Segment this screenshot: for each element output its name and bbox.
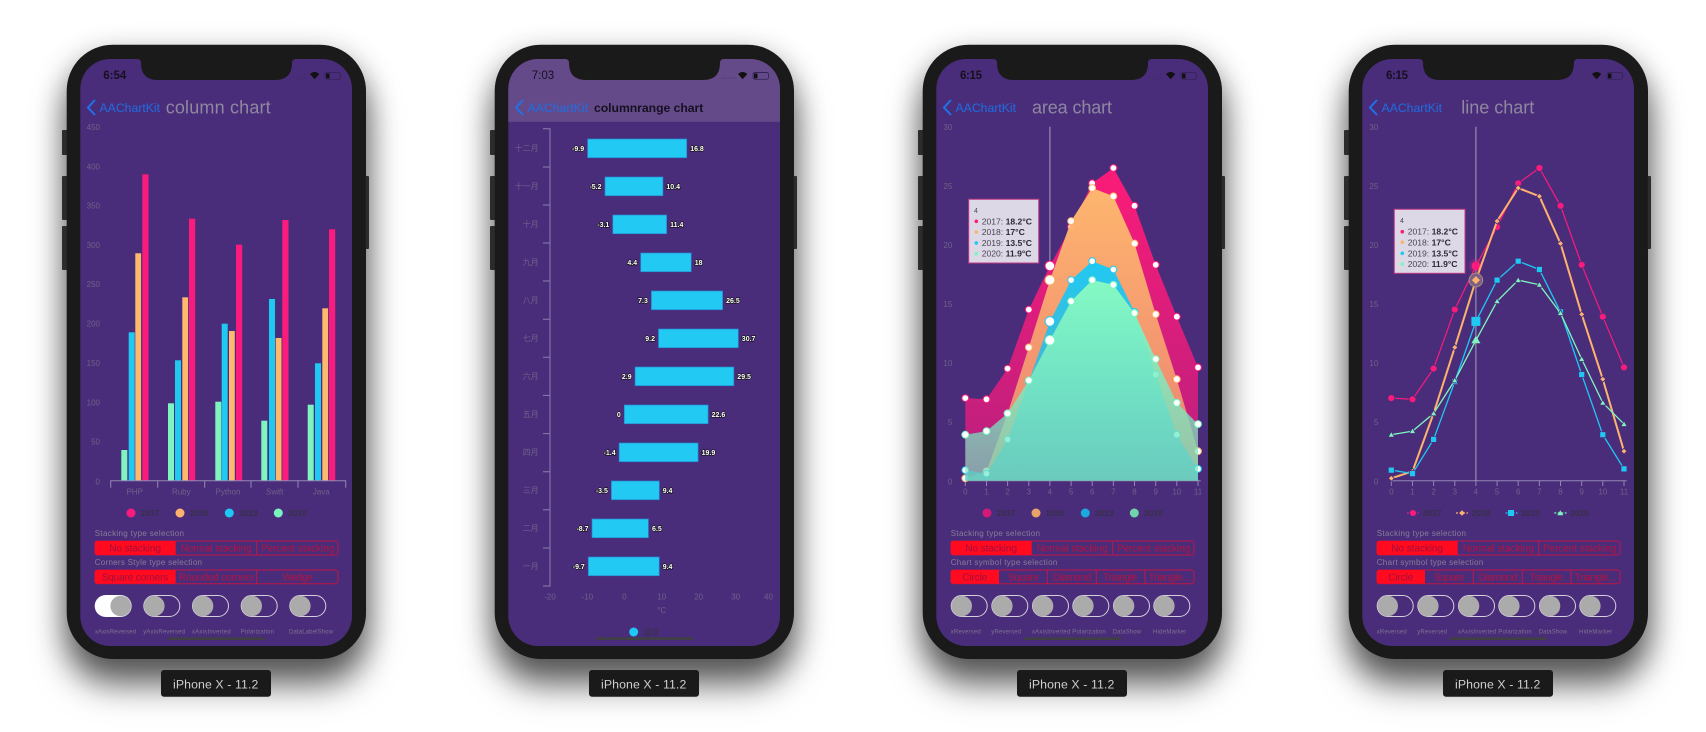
category axis: 五月 xyxy=(523,410,539,419)
category axis: 四月 xyxy=(523,448,539,457)
value axis labels: 10 xyxy=(657,592,667,602)
data labels high: 10.4 xyxy=(666,184,680,191)
status bar xyxy=(960,70,1196,82)
y axis labels: 0 xyxy=(96,478,101,486)
data labels low: 4.4 xyxy=(627,260,637,267)
range bars xyxy=(588,139,738,576)
stacking type selector: Normal stacking xyxy=(1037,544,1108,554)
data labels high: 30.7 xyxy=(742,336,756,343)
y axis labels: 5 xyxy=(948,418,953,427)
crosshair xyxy=(1049,127,1051,481)
chart symbol selector xyxy=(951,558,1194,584)
tooltip: 2020: 11.9°C xyxy=(982,249,1032,259)
stacking type selector: No stacking xyxy=(1391,544,1443,554)
device caption: iPhone X - 11.2 xyxy=(173,678,258,692)
chart symbol selector: Triangle... xyxy=(1575,572,1616,583)
legend: 2019 xyxy=(239,508,258,518)
legend: 2020 xyxy=(1570,508,1589,518)
toggle switches xyxy=(95,595,334,636)
device frame xyxy=(1344,45,1651,659)
tooltip: 2019: 13.5°C xyxy=(982,238,1032,248)
category axis xyxy=(515,129,550,586)
toggle switches: xAxisInverted xyxy=(1032,630,1070,636)
toggle switches: HideMarker xyxy=(1153,630,1186,636)
toggle switches: Polarization xyxy=(1072,630,1106,636)
data labels low: 9.2 xyxy=(645,336,655,343)
data labels low: -1.4 xyxy=(604,450,616,457)
status bar xyxy=(532,70,768,82)
corners style selector: Wedge xyxy=(283,572,313,583)
x axis xyxy=(963,481,1203,496)
legend: 2017 xyxy=(997,508,1016,518)
tooltip xyxy=(969,199,1039,263)
navigation bar: line chart xyxy=(1461,98,1534,118)
y axis labels: 250 xyxy=(87,280,101,289)
value axis labels: 0 xyxy=(622,592,627,602)
tooltip: 2017: 18.2°C xyxy=(982,216,1032,226)
legend xyxy=(982,508,1163,518)
value axis labels: 40 xyxy=(764,592,773,602)
chart symbol selector: Diamond xyxy=(1053,572,1091,583)
status bar: 6:15 xyxy=(960,70,983,82)
device caption xyxy=(589,670,699,697)
status bar xyxy=(103,70,340,82)
y axis labels: 25 xyxy=(943,182,953,191)
chart symbol selector: Triangle xyxy=(1103,572,1138,583)
chart symbol selector: Chart symbol type selection xyxy=(1377,558,1483,567)
tooltip: 2018: 17°C xyxy=(1408,237,1451,247)
tooltip: 2019: 13.5°C xyxy=(1408,248,1458,258)
x axis: 10 xyxy=(1172,488,1182,496)
series 2018 columns xyxy=(135,253,328,481)
x axis: 1 xyxy=(984,488,989,496)
series 2019 line xyxy=(1388,258,1627,477)
phone drop shadow: area chart xyxy=(923,45,1222,659)
category axis: 二月 xyxy=(523,524,539,533)
status bar: 6:15 xyxy=(1386,70,1409,82)
data labels high: 18 xyxy=(695,260,703,267)
category axis: 七月 xyxy=(523,334,539,343)
data labels high: 26.5 xyxy=(726,298,740,305)
stacking type selector: Normal stacking xyxy=(181,544,252,554)
chart symbol selector: Chart symbol type selection xyxy=(951,558,1057,567)
category axis: 三月 xyxy=(523,486,539,495)
device frame xyxy=(62,45,369,659)
y axis labels: 0 xyxy=(948,478,953,486)
status bar: 6:54 xyxy=(103,70,127,82)
x axis: 7 xyxy=(1537,488,1542,496)
x axis: 4 xyxy=(1048,488,1053,496)
data labels high: 29.5 xyxy=(737,374,751,381)
value axis labels xyxy=(544,592,773,615)
data labels high: 22.6 xyxy=(712,412,725,419)
value axis labels: 30 xyxy=(731,592,741,602)
data labels high: 6.5 xyxy=(652,526,662,533)
phone: area chart xyxy=(918,45,1225,697)
category axis: 十一月 xyxy=(515,181,539,191)
x axis: 2 xyxy=(1005,488,1010,496)
stacking type selector: Percent stacking xyxy=(261,544,334,554)
stacking type selector: Percent stacking xyxy=(1543,544,1616,554)
tooltip xyxy=(1394,209,1465,273)
toggle switches: DataShow xyxy=(1539,630,1568,636)
x axis xyxy=(1389,481,1629,496)
device caption: iPhone X - 11.2 xyxy=(1455,678,1540,692)
x axis: 8 xyxy=(1558,488,1563,496)
corners style selector xyxy=(95,558,338,584)
y axis labels: 300 xyxy=(87,241,101,250)
device caption xyxy=(161,670,271,697)
series 2020 area xyxy=(962,277,1201,481)
status bar: 7:03 xyxy=(532,70,554,82)
device caption: iPhone X - 11.2 xyxy=(601,678,686,692)
y axis labels: 10 xyxy=(943,359,953,368)
series 2017 area xyxy=(962,165,1201,481)
phone drop shadow: columnrange chart xyxy=(495,45,794,659)
x axis: Ruby xyxy=(172,488,191,496)
toggle switches: DataLabelShow xyxy=(289,630,334,636)
series 2018 line xyxy=(1388,185,1627,481)
corners style selector: Rounded corners xyxy=(179,572,254,583)
y axis labels: 450 xyxy=(87,123,101,132)
category axis: 一月 xyxy=(523,562,539,571)
navigation bar: AAChartKit xyxy=(100,101,161,115)
tooltip: 2018: 17°C xyxy=(982,227,1025,237)
x axis: 4 xyxy=(1474,488,1479,496)
stacking type selector: No stacking xyxy=(965,544,1017,554)
legend xyxy=(629,627,659,637)
y axis labels: 10 xyxy=(1369,359,1379,368)
column chart xyxy=(87,123,346,496)
category axis: 六月 xyxy=(523,371,539,381)
x axis: 11 xyxy=(1620,488,1629,496)
y axis labels: 30 xyxy=(943,123,953,132)
data labels low: -8.7 xyxy=(576,526,589,533)
columnrange chart xyxy=(515,129,773,615)
line chart xyxy=(1369,123,1629,496)
x axis: 5 xyxy=(1495,488,1500,496)
data labels low: 7.3 xyxy=(638,298,648,305)
legend: 2020 xyxy=(1144,508,1163,518)
data labels low: -3.1 xyxy=(597,222,609,229)
toggle switches: yReversed xyxy=(1417,630,1447,636)
stacking type selector: Normal stacking xyxy=(1463,544,1534,554)
phone drop shadow: line chart xyxy=(1349,45,1648,659)
toggle switches: Polarization xyxy=(1498,630,1532,636)
toggle switches: yAxisReversed xyxy=(143,630,185,636)
x axis: Swift xyxy=(266,488,284,496)
data labels low: -9.9 xyxy=(572,146,584,153)
stacking type selector xyxy=(1377,529,1620,555)
toggle switches xyxy=(951,596,1190,636)
device caption xyxy=(1017,670,1127,697)
series 2017 columns xyxy=(142,174,335,481)
device frame xyxy=(490,45,797,659)
y axis labels: 100 xyxy=(87,398,101,408)
navigation bar xyxy=(944,98,1112,118)
x axis: 9 xyxy=(1579,488,1584,496)
crosshair xyxy=(1475,127,1477,481)
data labels high: 9.4 xyxy=(663,564,673,571)
device caption: iPhone X - 11.2 xyxy=(1029,678,1114,692)
data labels high: 16.8 xyxy=(690,146,704,153)
corners style selector: Corners Style type selection xyxy=(95,558,202,567)
x axis: 9 xyxy=(1153,488,1158,496)
legend: 2018 xyxy=(1046,508,1065,518)
toggle switches: xAxisInverted xyxy=(1458,630,1496,636)
y axis labels: 30 xyxy=(1369,123,1379,132)
stacking type selector: Stacking type selection xyxy=(95,529,184,538)
series 2020 line xyxy=(1388,277,1627,437)
chart symbol selector xyxy=(1377,558,1620,584)
y axis labels: 50 xyxy=(91,438,101,446)
x axis xyxy=(111,481,346,496)
toggle switches: Polarization xyxy=(241,630,274,636)
y axis labels: 25 xyxy=(1369,182,1379,191)
navigation bar: column chart xyxy=(166,98,271,118)
x axis: 10 xyxy=(1598,488,1608,496)
x axis: 5 xyxy=(1069,488,1074,496)
y axis labels: 150 xyxy=(87,359,101,368)
value axis labels: -20 xyxy=(544,592,556,602)
series 2017 line xyxy=(1388,164,1628,403)
x axis: 3 xyxy=(1453,488,1458,496)
legend: 2017 xyxy=(1423,508,1442,518)
toggle switches: xReversed xyxy=(951,630,981,636)
stacking type selector: Percent stacking xyxy=(1117,544,1190,554)
data labels high: 9.4 xyxy=(663,488,673,495)
x axis: Java xyxy=(313,488,330,496)
legend xyxy=(1407,508,1589,518)
toggle switches: xAxisReversed xyxy=(95,630,136,636)
x axis: 7 xyxy=(1111,488,1116,496)
value axis labels: 20 xyxy=(694,592,704,602)
x axis: 0 xyxy=(963,488,968,496)
data labels high: 11.4 xyxy=(670,222,683,229)
chart symbol selector: Triangle xyxy=(1529,572,1564,583)
y axis labels: 15 xyxy=(943,300,953,309)
y axis labels: 350 xyxy=(87,202,101,210)
navigation bar: AAChartKit xyxy=(956,101,1017,115)
chart symbol selector: Diamond xyxy=(1479,572,1517,583)
value axis labels: °C xyxy=(657,606,666,615)
series 2018 area xyxy=(962,185,1201,482)
tooltip: 4 xyxy=(1400,218,1404,225)
status bar xyxy=(1386,70,1622,82)
data labels low: 2.9 xyxy=(622,374,632,381)
data labels low: -3.5 xyxy=(596,488,608,495)
area chart xyxy=(943,123,1203,496)
y axis labels: 0 xyxy=(1374,478,1379,486)
device caption xyxy=(1443,670,1553,697)
navigation bar: columnrange chart xyxy=(594,101,703,115)
corners style selector: Square corners xyxy=(102,572,168,583)
y axis labels xyxy=(87,123,101,486)
chart symbol selector: Triangle... xyxy=(1149,572,1190,583)
navigation bar: area chart xyxy=(1032,98,1112,118)
legend: 2018 xyxy=(1472,508,1491,518)
y axis labels xyxy=(943,123,953,486)
legend: 温度 xyxy=(643,627,659,637)
y axis labels: 200 xyxy=(87,320,101,328)
x axis: 0 xyxy=(1389,488,1394,496)
category axis: 八月 xyxy=(523,296,539,305)
legend: 2018 xyxy=(190,508,209,518)
navigation bar: AAChartKit xyxy=(528,101,589,115)
stacking type selector xyxy=(95,529,338,555)
stacking type selector: Stacking type selection xyxy=(1377,529,1466,538)
data labels high xyxy=(652,146,756,571)
stacking type selector: No stacking xyxy=(109,544,161,554)
category axis: 十月 xyxy=(523,219,539,229)
legend: 2019 xyxy=(1095,508,1114,518)
legend: 2017 xyxy=(141,508,160,518)
stacking type selector: Stacking type selection xyxy=(951,529,1040,538)
x axis: 3 xyxy=(1027,488,1032,496)
chart symbol selector: Circle xyxy=(962,572,988,583)
legend: 2019 xyxy=(1521,508,1540,518)
y axis labels: 5 xyxy=(1374,418,1379,427)
category axis: 十二月 xyxy=(515,143,539,153)
series 2020 columns xyxy=(121,402,314,481)
y axis labels xyxy=(1369,123,1379,486)
chart symbol selector: Circle xyxy=(1388,572,1414,583)
y axis labels: 20 xyxy=(1369,241,1379,250)
legend: 2020 xyxy=(288,508,307,518)
tooltip: 2017: 18.2°C xyxy=(1408,227,1458,237)
x axis: Python xyxy=(216,488,240,496)
x axis: PHP xyxy=(126,488,143,496)
x axis: 2 xyxy=(1431,488,1436,496)
stacking type selector xyxy=(951,529,1194,555)
data labels low: -9.7 xyxy=(573,564,585,571)
toggle switches: yReversed xyxy=(991,630,1021,636)
y axis labels: 20 xyxy=(943,241,953,250)
tooltip: 2020: 11.9°C xyxy=(1408,259,1458,269)
phone: line chart xyxy=(1344,45,1651,697)
series 2019 columns xyxy=(129,299,321,481)
phone drop shadow: column chart xyxy=(67,45,366,659)
x axis: 8 xyxy=(1132,488,1137,496)
x axis: 1 xyxy=(1410,488,1415,496)
y axis labels: 15 xyxy=(1369,300,1379,309)
chart symbol selector: Square xyxy=(1434,572,1465,583)
toggle switches: HideMarker xyxy=(1579,630,1612,636)
navigation bar: AAChartKit xyxy=(1382,101,1443,115)
x axis: 11 xyxy=(1194,488,1203,496)
category axis: 九月 xyxy=(523,258,539,267)
x axis: 6 xyxy=(1516,488,1521,496)
data labels low xyxy=(572,146,655,571)
phone: column chart xyxy=(62,45,369,697)
data labels high: 19.9 xyxy=(702,450,715,457)
toggle switches: xAxisInverted xyxy=(192,630,231,636)
legend xyxy=(126,508,307,518)
toggle switches xyxy=(1377,596,1616,636)
toggle switches: DataShow xyxy=(1113,630,1142,636)
data labels low: -5.2 xyxy=(589,184,602,191)
data labels low: 0 xyxy=(617,412,621,419)
tooltip: 4 xyxy=(974,208,978,215)
chart symbol selector: Square xyxy=(1008,572,1039,583)
y axis labels: 400 xyxy=(87,162,101,172)
device frame xyxy=(918,45,1225,659)
navigation bar xyxy=(1370,98,1534,118)
navigation bar xyxy=(516,100,703,115)
navigation bar xyxy=(88,98,271,118)
series 2019 area xyxy=(962,258,1201,481)
phone: columnrange chart xyxy=(490,45,797,697)
value axis labels: -10 xyxy=(582,592,594,602)
x axis: 6 xyxy=(1090,488,1095,496)
toggle switches: xReversed xyxy=(1377,630,1407,636)
